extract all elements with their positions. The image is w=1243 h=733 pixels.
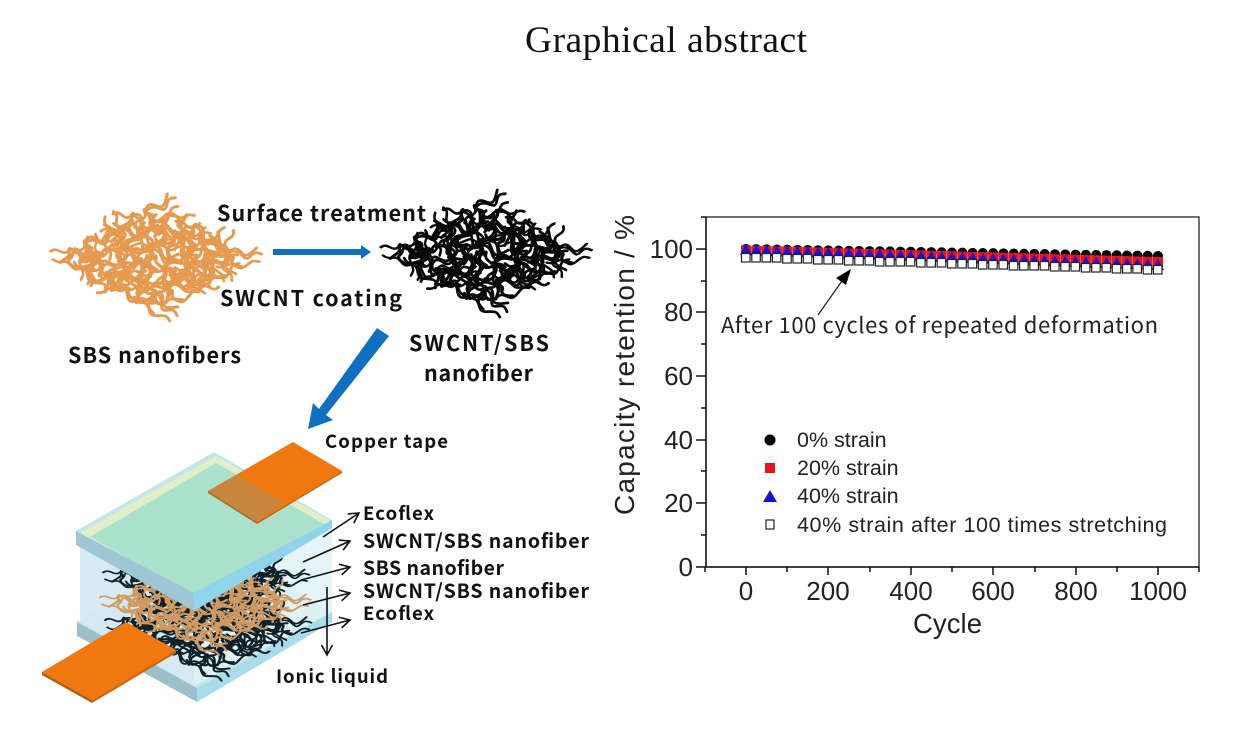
- x-axis tick labels: 200: [806, 576, 850, 606]
- label: SWCNT/SBS nanofiber: SWCNT/SBS: [409, 327, 549, 358]
- axes: [696, 217, 1199, 575]
- series: 40% strain after 100 times stretching: [746, 258, 1158, 270]
- arrow: surface treatment: [273, 245, 371, 259]
- y-axis tick labels: 40: [664, 425, 693, 455]
- label: SWCNT/SBS nanofiber top: [303, 525, 589, 562]
- annotation text: After 100 cycles of repeated deformation: [721, 308, 1158, 340]
- label: Ecoflex top: Ecoflex: [363, 500, 435, 526]
- y-axis tick labels: 100: [650, 234, 693, 264]
- series: 0% strain: [746, 249, 1158, 256]
- x-axis tick labels: 1000: [1129, 576, 1187, 606]
- ionic liquid: [80, 525, 332, 686]
- icon: SBS nanofibers mat: [49, 189, 263, 326]
- icon: bottom copper tape: [42, 622, 176, 703]
- legend: 40% strain: [797, 484, 899, 508]
- y-axis tick labels: [650, 234, 693, 582]
- y-axis title: Capacity retention / %: [609, 215, 640, 515]
- label: SWCNT/SBS nanofiber: [409, 327, 549, 388]
- label: SBS nanofiber: [301, 552, 504, 581]
- legend: 40% strain after 100 times stretching: [797, 513, 1167, 537]
- panel: device stack: [42, 428, 589, 703]
- label: SWCNT/SBS nanofiber bottom: SWCNT/SBS nanofiber: [363, 575, 589, 604]
- label: ionic liquid: Ionic liquid: [276, 663, 388, 689]
- panel: fabrication schematic: [49, 185, 593, 429]
- top Ecoflex slab: [76, 452, 332, 611]
- x-axis tick labels: 0: [739, 576, 753, 606]
- arrow: to device: [308, 328, 389, 429]
- label: SBS nanofibers: SBS nanofibers: [68, 339, 241, 370]
- label: SWCNT/SBS nanofiber: nanofiber: [424, 357, 534, 388]
- label: SWCNT coating: SWCNT coating: [220, 282, 402, 313]
- upper SWCNT/SBS nanofiber layer: [101, 521, 311, 634]
- label: copper tape: Copper tape: [325, 428, 448, 454]
- series: 20% strain: [746, 251, 1158, 262]
- y-axis tick labels: 60: [664, 361, 693, 391]
- bottom Ecoflex slab: [77, 545, 332, 702]
- lower SWCNT/SBS nanofiber layer: [103, 566, 313, 685]
- label: SBS nanofiber: SBS nanofiber: [363, 552, 504, 581]
- label: ionic liquid: [276, 587, 388, 689]
- x-axis title: Cycle: [913, 608, 982, 639]
- y-axis tick labels: 20: [664, 488, 693, 518]
- legend: 0% strain: [797, 428, 887, 452]
- x-axis tick labels: 400: [889, 576, 933, 606]
- icon: SWCNT/SBS nanofiber mat: [379, 185, 593, 322]
- title: Graphical abstract: [525, 20, 808, 61]
- label: Ecoflex top: [323, 500, 435, 537]
- x-axis tick labels: 800: [1054, 576, 1098, 606]
- annotation arrow: [818, 269, 851, 315]
- label: Ecoflex bottom: Ecoflex: [363, 600, 435, 626]
- legend: [763, 428, 1167, 537]
- x-axis tick labels: [739, 576, 1187, 606]
- x-axis tick labels: 600: [971, 576, 1015, 606]
- chart: capacity retention vs cycle: [609, 215, 1199, 639]
- label: SWCNT/SBS nanofiber top: SWCNT/SBS nanofiber: [363, 525, 589, 554]
- label: surface treatment: Surface treatment: [217, 197, 426, 228]
- icon: top copper tape: [208, 442, 342, 524]
- SBS nanofiber layer: [98, 546, 312, 659]
- label: Ecoflex bottom: [301, 600, 435, 633]
- legend: 20% strain: [797, 456, 899, 480]
- y-axis tick labels: 80: [664, 297, 693, 327]
- series: 40% strain: [746, 250, 1158, 265]
- y-axis tick labels: 0: [679, 552, 693, 582]
